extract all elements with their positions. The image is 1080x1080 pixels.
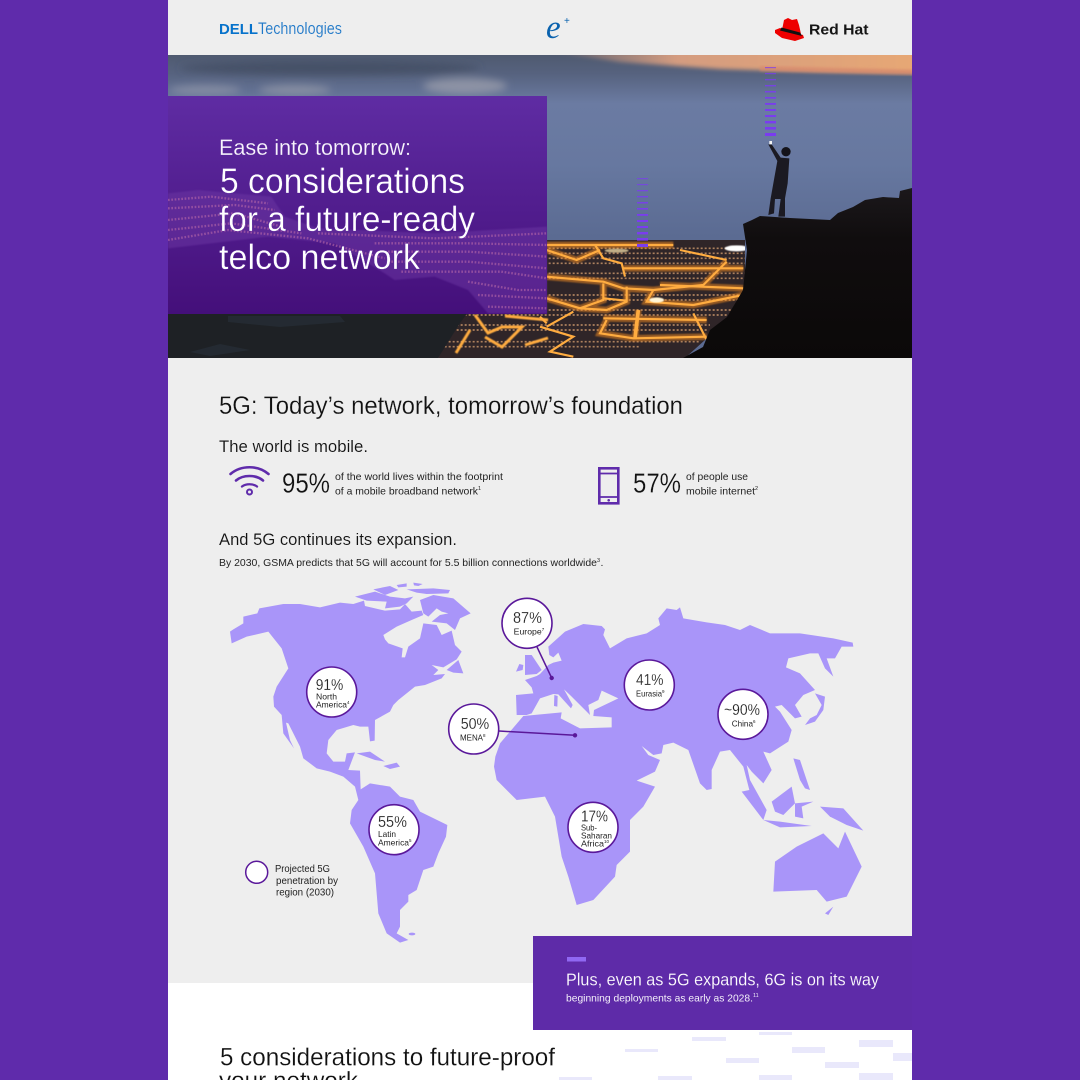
hero title: for a future-ready (219, 200, 475, 239)
region: Sub-Saharan Africa: 17% (581, 809, 608, 826)
callout: 6G (533, 936, 912, 1030)
heading: 5 considerations: 5 considerations to future-proof (220, 1044, 555, 1072)
subheading: world is mobile: The world is mobile. (219, 437, 368, 456)
stat: 95 percent: of a mobile broadband network (335, 486, 479, 498)
region: North America: North (316, 691, 337, 701)
panel: hero title box (168, 96, 547, 314)
stat: 95 percent (230, 467, 503, 498)
box: tinted city lights (168, 190, 547, 313)
legend: penetration by (276, 876, 338, 887)
map: Eurasia, Africa and Oceania (494, 607, 863, 915)
region: MENA: 8 (483, 733, 486, 738)
text: GSMA prediction: By 2030, GSMA predicts that 5G will account for 5.5 billion connections worldwide (219, 557, 597, 569)
region: MENA: 50% (461, 716, 489, 733)
logo: Dell Technologies: DELL (219, 21, 258, 38)
logo: Red Hat: Red Hat (809, 22, 869, 38)
region: North America: 91% (316, 677, 343, 694)
logo: e+ (546, 10, 570, 46)
logo: Dell Technologies (219, 19, 342, 38)
region: North America (307, 667, 357, 717)
stat: 57 percent: 2 (755, 486, 758, 492)
region: Latin America: Latin (378, 829, 396, 839)
logo: e+: e (546, 10, 561, 46)
region: MENA: MENA (460, 732, 483, 742)
logo: Red Hat (775, 18, 869, 41)
signal bars: upper (765, 67, 776, 136)
region: Europe: 87% (513, 610, 542, 627)
photo: sky and sea (168, 55, 912, 358)
photo: sunset glow (568, 55, 912, 76)
text: GSMA prediction: . (600, 557, 603, 569)
region: Europe: Europe (514, 626, 542, 636)
signal bars: lower (637, 178, 648, 247)
region: Sub-Saharan Africa: Africa (581, 838, 604, 848)
region: MENA (449, 704, 499, 754)
hero title: 5 considerations (220, 162, 465, 201)
section heading: 5G: Today’s network, tomorrow’s foundation (219, 392, 683, 420)
photo: city lights (437, 245, 749, 357)
region: Eurasia: 9 (662, 689, 665, 694)
region: Europe: 7 (542, 627, 545, 632)
connector: Europe (537, 647, 554, 680)
region: Sub-Saharan Africa: 10 (604, 839, 610, 844)
hero kicker: Ease into tomorrow: (219, 135, 411, 160)
panel: 5G section background (168, 358, 912, 983)
icon: wifi (230, 467, 268, 494)
photo: lights bottom-left (456, 315, 548, 353)
region: Latin America: 55% (378, 814, 407, 831)
logo: e+: + (564, 16, 570, 27)
subheading: 5G expansion: And 5G continues its expansion. (219, 530, 457, 549)
region: Eurasia: 41% (636, 672, 664, 689)
hero title (219, 168, 475, 270)
callout: 6G: Plus, even as 5G expands, 6G is on its way (566, 970, 879, 990)
region: Sub-Saharan Africa: Saharan (581, 830, 612, 840)
legend: region (2030) (276, 888, 334, 898)
region: Latin America (369, 805, 419, 855)
legend: Projected 5G (275, 864, 330, 875)
region: Eurasia (624, 660, 674, 710)
decorative dash pattern (559, 1032, 912, 1080)
stat: 57 percent: mobile internet (686, 486, 755, 498)
text: GSMA prediction: 3 (597, 558, 600, 564)
callout: 6G: 11 (753, 993, 759, 999)
stat: 95 percent: 1 (478, 486, 481, 492)
infographic page (168, 0, 912, 1080)
region: North America: America (316, 700, 347, 710)
stat: 57 percent: 57% (633, 468, 681, 498)
region: Latin America: America (378, 837, 409, 847)
hero title: telco network (219, 238, 420, 277)
photo: city base (438, 240, 745, 358)
stat: 95 percent: 95% (282, 468, 330, 498)
icon: phone (599, 468, 618, 503)
region: Latin America: 5 (409, 838, 412, 843)
map: Americas (230, 583, 471, 943)
stat: 95 percent: of the world lives within the footprint (335, 471, 503, 483)
callout: 6G: beginning deployments as early as 2028. (566, 992, 753, 1004)
region: China: China (732, 718, 753, 728)
photo: cliff silhouette (683, 188, 912, 358)
logo: Dell Technologies: Technologies (258, 19, 342, 38)
panel: logo header (168, 0, 912, 55)
panel: hero photo (168, 50, 930, 358)
region: Europe (502, 598, 552, 648)
world map (230, 583, 863, 943)
connector: MENA (499, 731, 577, 738)
region: Eurasia: Eurasia (636, 688, 662, 698)
stat: 57 percent: of people use (686, 471, 748, 483)
region: China: 6 (753, 719, 756, 724)
photo: dark foreground (168, 314, 467, 358)
region: China: ~90% (724, 702, 760, 719)
region: North America: 4 (347, 700, 350, 705)
stat: 57 percent (599, 468, 758, 503)
photo: person silhouette (768, 141, 791, 217)
region: Sub-Saharan Africa (568, 802, 618, 852)
photo: clouds (169, 61, 507, 95)
region: Sub-Saharan Africa: Sub- (581, 823, 597, 833)
legend (246, 861, 338, 898)
region: China (718, 689, 768, 739)
panel: lower white section (168, 983, 912, 1080)
